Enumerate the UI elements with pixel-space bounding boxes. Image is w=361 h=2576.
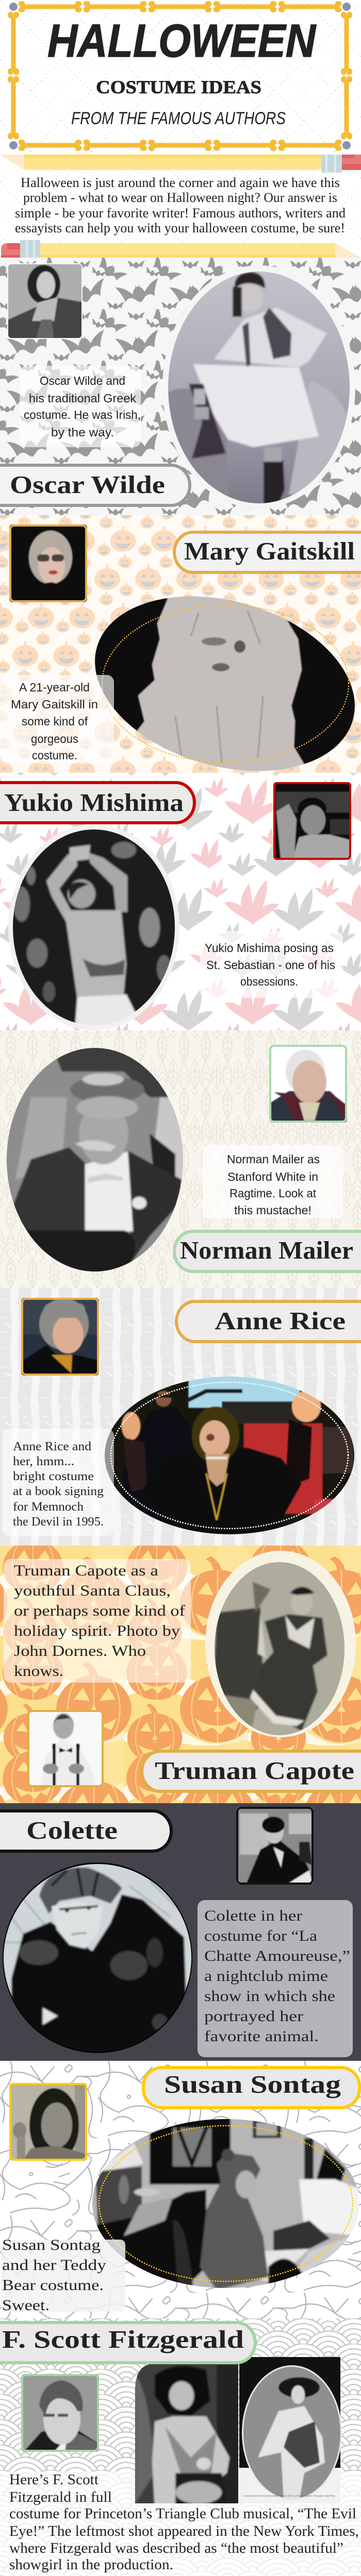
bone frame	[8, 1, 352, 151]
panel: Colette	[0, 1803, 361, 2061]
name label: Anne Rice: Anne Rice	[215, 1307, 346, 1335]
text block: F. Scott Fitzgerald caption: Here’s F. Scott	[9, 2472, 99, 2488]
text block: Norman Mailer caption: Stanford White in	[227, 1170, 318, 1183]
text block: Anne Rice caption: Anne Rice and	[13, 1440, 91, 1453]
text block: Yukio Mishima caption: obsessions.	[240, 975, 298, 988]
photo: Norman Mailer portrait	[270, 1046, 347, 1123]
name label: Truman Capote: Truman Capote	[155, 1756, 354, 1785]
photo: Yukio Mishima portrait	[273, 782, 351, 860]
text block: Susan Sontag caption: and her Teddy	[2, 2257, 106, 2274]
text block: Colette caption: a nightclub mime	[204, 1968, 328, 1985]
text block: Truman Capote caption	[4, 1559, 191, 1683]
name label: Anne Rice	[176, 1301, 361, 1342]
text block: Oscar Wilde caption: Oscar Wilde and	[40, 374, 125, 387]
photo: Anne Rice portrait	[21, 1298, 99, 1376]
text block: Colette caption: Chatte Amoureuse,”	[204, 1947, 350, 1964]
panel: Norman Mailer	[0, 1030, 361, 1288]
text block: Anne Rice caption: bright costume	[13, 1470, 94, 1483]
text block: Truman Capote caption: John Dornes. Who	[14, 1642, 146, 1659]
name label: Oscar Wilde: Oscar Wilde	[10, 470, 165, 499]
photo: Truman Capote as Santa Claus	[205, 1551, 356, 1739]
photo: Yukio Mishima as St. Sebastian	[8, 824, 180, 1030]
panel: Yukio Mishima	[0, 773, 361, 1030]
text block: Anne Rice caption: the Devil in 1995.	[13, 1515, 104, 1529]
photo: Colette in cat costume	[0, 1857, 196, 2058]
photo: Fitzgerald newspaper clipping	[239, 2357, 343, 2506]
name label: Norman Mailer	[174, 1231, 361, 1272]
intro text	[15, 175, 346, 235]
name label: Oscar Wilde	[0, 465, 190, 505]
text block: Oscar Wilde caption	[20, 366, 141, 447]
text block: F. Scott Fitzgerald caption: where Fitzgerald was described as “the most beautiful”	[9, 2540, 343, 2556]
subtitle: from the famous authors: FROM THE FAMOUS AUTHORS	[71, 109, 286, 128]
subtitle: costume ideas: COSTUME IDEAS	[96, 77, 261, 97]
text block: Norman Mailer caption	[203, 1145, 343, 1218]
intro text: essayists can help you with your halloween costume, be sure!	[15, 221, 345, 235]
text block: Truman Capote caption: Truman Capote as a	[14, 1562, 158, 1579]
icon: top pencil	[0, 155, 361, 173]
photo: Virginia Woolf and friends in Abyssinian costume	[0, 2573, 253, 2576]
name label: F. Scott Fitzgerald	[0, 2323, 255, 2363]
text block: Colette caption	[198, 1900, 353, 2057]
photo: Fitzgerald showgirl portrait	[135, 2364, 238, 2503]
intro text: Halloween is just around the corner and again we have this	[21, 175, 340, 190]
text block: Colette caption: show in which she	[204, 1988, 335, 2005]
panel: Oscar Wilde	[0, 258, 361, 515]
panel: Anne Rice	[0, 1288, 361, 1546]
photo: Mary Gaitskill furry costume	[88, 592, 361, 773]
text block: Colette caption: favorite animal.	[204, 2028, 319, 2045]
text block: Colette caption: Colette in her	[204, 1907, 302, 1924]
name label: Norman Mailer: Norman Mailer	[180, 1236, 353, 1264]
text block: Yukio Mishima caption: St. Sebastian - one of his	[206, 958, 335, 972]
text block: Susan Sontag caption	[1, 2236, 125, 2314]
name label: Mary Gaitskill: Mary Gaitskill	[184, 537, 355, 565]
photo: Oscar Wilde in Greek costume	[162, 265, 356, 509]
text block: Truman Capote caption: or perhaps some kind of	[14, 1602, 185, 1619]
panel: Virginia Woolf	[0, 2573, 361, 2576]
name label: Colette: Colette	[26, 1816, 118, 1844]
text block: Yukio Mishima caption	[200, 931, 343, 998]
text block: F. Scott Fitzgerald caption: Fitzgerald in full	[9, 2489, 112, 2505]
text block: Colette caption: portrayed her	[204, 2008, 303, 2025]
text block: Norman Mailer caption: Ragtime. Look at	[229, 1187, 317, 1200]
text block: Truman Capote caption: holiday spirit. Photo by	[14, 1622, 180, 1639]
photo: Mary Gaitskill portrait	[9, 524, 87, 602]
text block: Susan Sontag caption: Susan Sontag	[2, 2236, 101, 2253]
name label: F. Scott Fitzgerald: F. Scott Fitzgerald	[2, 2325, 244, 2353]
photo: Truman Capote portrait	[28, 1711, 103, 1790]
text block: Susan Sontag caption: Bear costume.	[2, 2277, 104, 2294]
text block: Truman Capote caption: knows.	[14, 1663, 63, 1680]
photo: Oscar Wilde portrait	[7, 263, 83, 339]
text block: F. Scott Fitzgerald caption: showgirl in the production.	[9, 2557, 173, 2573]
title: Halloween: HALLOWEEN	[47, 15, 317, 67]
icon: bottom pencil	[1, 240, 361, 258]
name label: Susan Sontag: Susan Sontag	[164, 2070, 341, 2098]
text block: Susan Sontag caption: Sweet.	[2, 2297, 50, 2314]
text block: Anne Rice caption	[3, 1429, 114, 1536]
panel: title header	[0, 0, 361, 258]
text block: F. Scott Fitzgerald caption: costume for Princeton’s Triangle Club musical, “The Evil	[9, 2506, 356, 2522]
name label: Mary Gaitskill	[174, 532, 361, 572]
photo: Norman Mailer as Stanford White	[3, 1043, 188, 1275]
photo: Fitzgerald newspaper clipping: Conceded the Most Beautiful "Show Girl" in the Princeton Triangle Club Play	[243, 2495, 336, 2497]
text block: Oscar Wilde caption: costume. He was Irish,	[24, 408, 141, 421]
text block: Colette caption: costume for “La	[204, 1927, 317, 1944]
name label: Colette	[0, 1811, 171, 1851]
text block: Mary Gaitskill caption: gorgeous	[31, 732, 78, 745]
text block: Mary Gaitskill caption: A 21-year-old	[19, 681, 90, 694]
photo: Susan Sontag portrait	[9, 2083, 87, 2161]
text block: Anne Rice caption: at a book signing	[13, 1485, 104, 1498]
text block: Anne Rice caption: for Memnoch	[13, 1500, 84, 1514]
panel: F. Scott Fitzgerald	[0, 2318, 361, 2576]
panel: Mary Gaitskill	[0, 515, 361, 773]
photo: F. Scott Fitzgerald portrait	[21, 2374, 99, 2452]
text block: Norman Mailer caption: this mustache!	[234, 1204, 311, 1217]
panel: Truman Capote	[0, 1546, 361, 1803]
text block: Mary Gaitskill caption: Mary Gaitskill in	[11, 698, 98, 711]
panel: Susan Sontag	[0, 2061, 361, 2318]
text block: Yukio Mishima caption: Yukio Mishima posing as	[205, 941, 334, 955]
name label: Truman Capote	[142, 1751, 361, 1791]
text block: Mary Gaitskill caption: some kind of	[22, 715, 88, 728]
text block: Mary Gaitskill caption	[0, 675, 114, 764]
name label: Yukio Mishima: Yukio Mishima	[4, 788, 184, 817]
intro text: problem - what to wear on Halloween night? Our answer is	[23, 190, 337, 205]
intro text: simple - be your favorite writer! Famous authors, writers and	[15, 206, 346, 221]
photo: Anne Rice in costume at book signing	[101, 1373, 361, 1538]
text block: F. Scott Fitzgerald caption	[0, 2471, 361, 2576]
text block: Oscar Wilde caption: by the way.	[51, 426, 114, 439]
text block: Oscar Wilde caption: his traditional Greek	[29, 392, 137, 405]
text block: Mary Gaitskill caption: costume.	[32, 749, 77, 762]
name label: Susan Sontag	[143, 2067, 359, 2108]
text block: Truman Capote caption: youthful Santa Claus,	[14, 1582, 171, 1599]
photo: Colette portrait	[236, 1807, 314, 1885]
name label: Yukio Mishima	[0, 783, 194, 823]
text block: Norman Mailer caption: Norman Mailer as	[227, 1153, 320, 1166]
photo: Susan Sontag teddy bear costume	[88, 2115, 361, 2293]
text block: Anne Rice caption: her, hmm...	[13, 1455, 74, 1468]
text block: F. Scott Fitzgerald caption: Eye!” The leftmost shot appeared in the New York Times,	[9, 2523, 359, 2539]
